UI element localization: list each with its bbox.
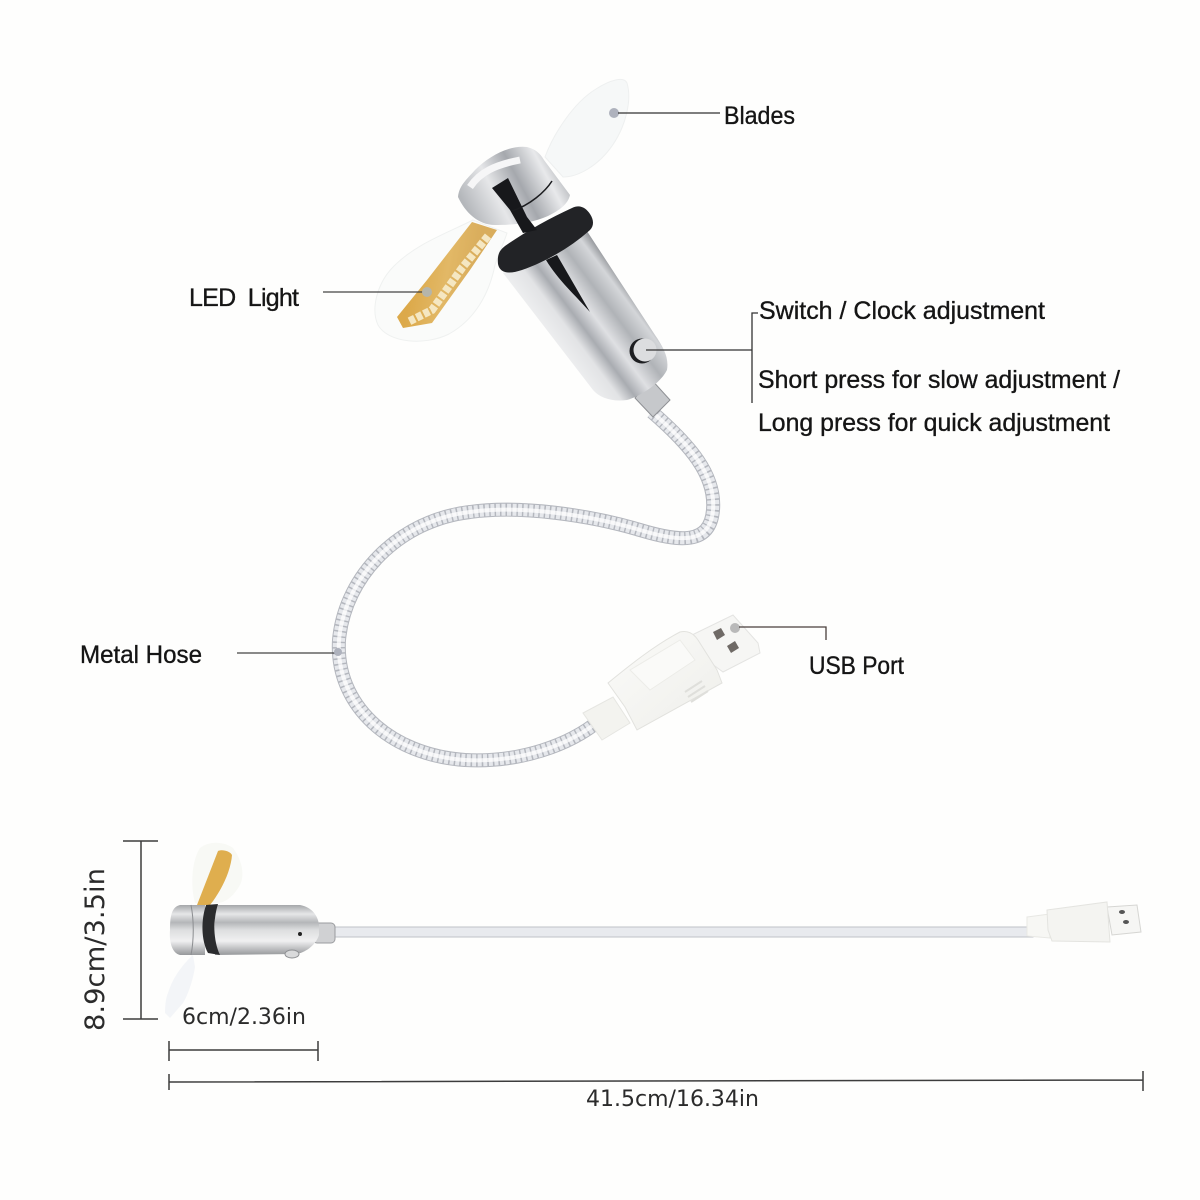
dimension: total length <box>169 1071 1143 1112</box>
side button <box>285 950 299 958</box>
label: blades: Blades <box>724 102 795 130</box>
USB plug <box>583 615 760 740</box>
upper fan blade <box>545 79 629 177</box>
leader: metal hose <box>237 648 342 656</box>
plug contact slots <box>713 628 739 653</box>
plug collar <box>583 697 630 740</box>
side upper blade <box>192 843 242 903</box>
label: metal hose: Metal Hose <box>80 641 202 669</box>
side neck <box>313 923 335 943</box>
dimension: head width <box>169 1005 318 1061</box>
text: short press: Short press for slow adjustment / <box>758 366 1120 394</box>
black rubber ring <box>498 206 593 272</box>
metal neck <box>635 378 670 417</box>
text: long press: Long press for quick adjustment <box>758 409 1110 437</box>
dimension: total length: 41.5cm/16.34in <box>586 1087 759 1112</box>
side hose <box>333 927 1033 937</box>
side-view USB plug <box>1027 902 1141 942</box>
switch button <box>630 338 656 364</box>
plug housing <box>608 631 722 730</box>
plug metal shell <box>690 615 760 672</box>
label: LED light: LED Light <box>189 284 299 312</box>
side ring <box>202 904 220 955</box>
label: switch: Switch / Clock adjustment <box>759 297 1045 325</box>
chrome fan body <box>503 225 667 401</box>
leader: LED light <box>323 287 432 297</box>
leader: switch bracket <box>646 313 758 403</box>
lower fan blade with LED strip <box>375 220 507 341</box>
label: USB port: USB Port <box>809 652 904 680</box>
side-view fan <box>165 843 1033 1018</box>
dimension: head width: 6cm/2.36in <box>182 1005 306 1030</box>
dimension: height: 8.9cm/3.5in <box>80 868 111 1031</box>
side body <box>215 905 319 955</box>
flexible metal hose <box>339 412 713 760</box>
side head <box>170 905 205 955</box>
dimension: height <box>80 841 158 1031</box>
leader: blades <box>609 108 720 118</box>
side LED strip <box>197 850 232 905</box>
leader: USB port <box>730 623 826 640</box>
side lower blade <box>165 955 195 1018</box>
chrome fan head <box>458 147 570 233</box>
